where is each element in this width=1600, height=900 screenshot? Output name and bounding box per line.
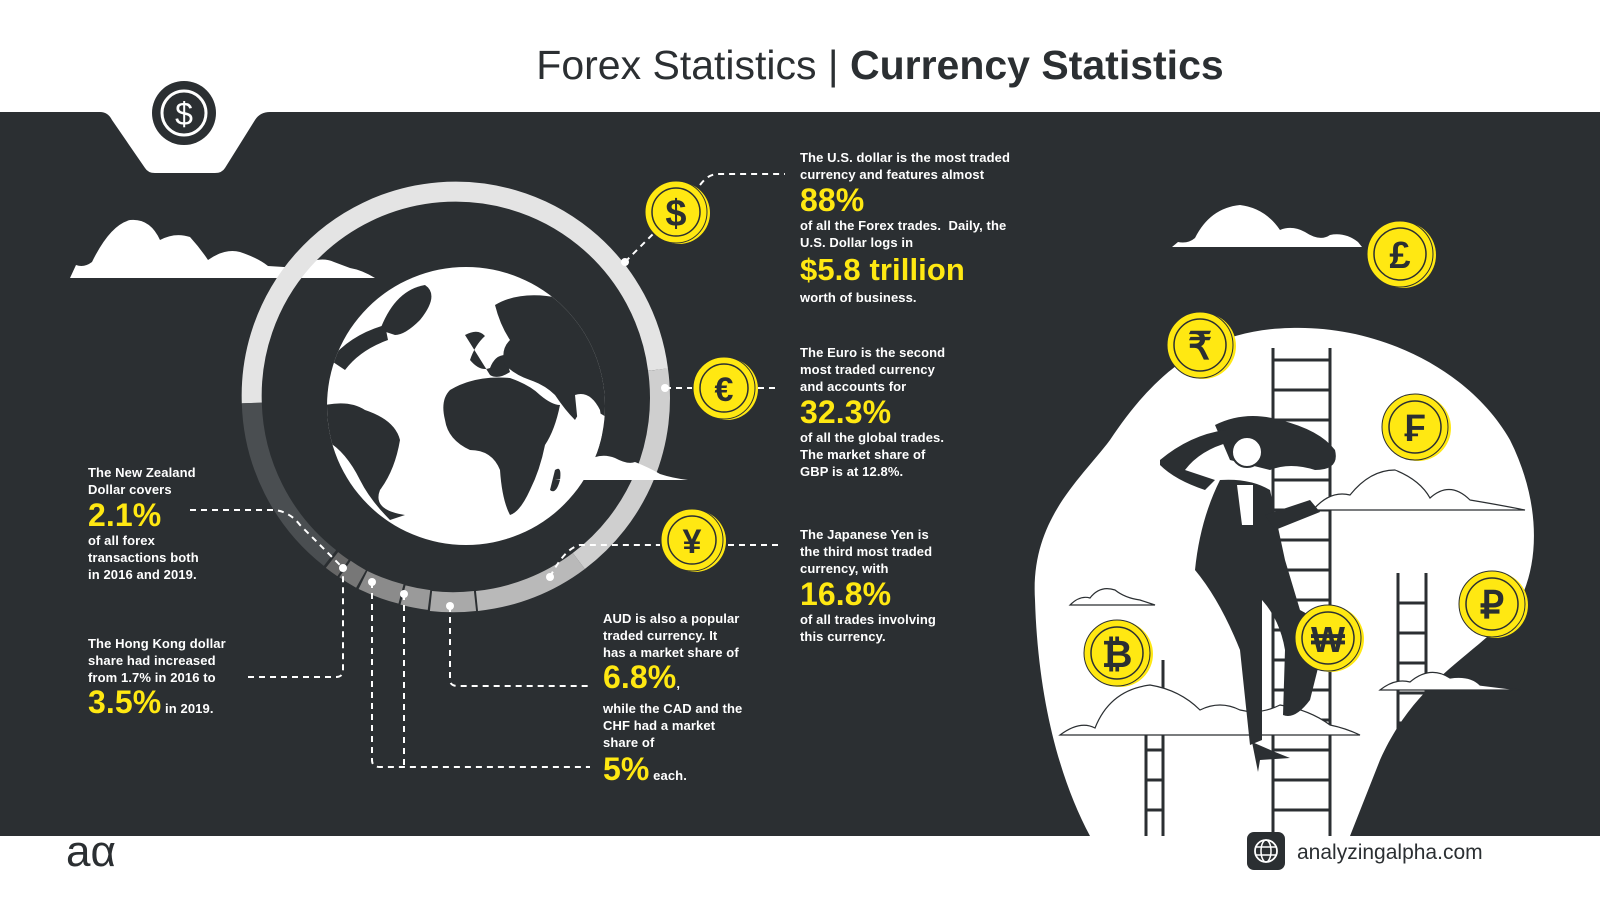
coin: franc	[1382, 394, 1451, 461]
coin: euro: €	[715, 371, 734, 409]
ladders	[1146, 348, 1426, 836]
coin: yen	[661, 509, 726, 572]
coin: yen: ¥	[683, 523, 702, 561]
text: Euro: The Euro is the second most traded currency and accounts for of all the global trades. The market share of GBP is at 12.8%.	[800, 345, 945, 479]
globe	[325, 267, 610, 545]
coin: rupee	[1167, 312, 1236, 379]
footer logo: aα	[66, 827, 116, 876]
footer website: analyzingalpha.com	[1297, 841, 1483, 864]
cloud: left	[70, 220, 375, 278]
text: AUD CAD CHF: 6.8%,	[603, 659, 680, 695]
text: HKD: 3.5% in 2019.	[88, 684, 214, 720]
connectors	[190, 174, 785, 767]
ring chart	[252, 192, 660, 602]
text: Yen: The Japanese Yen is the third most traded currency, with of all trades involving this currency.	[800, 527, 936, 644]
woman	[1160, 416, 1336, 772]
coin: bitcoin: ₿	[1102, 634, 1132, 676]
coin: won: ₩	[1311, 619, 1345, 660]
text: Yen: 16.8%	[800, 576, 891, 612]
coin: dollar	[645, 181, 710, 244]
cloud: globe	[555, 456, 688, 480]
coin: pound: £	[1389, 235, 1411, 277]
coin: rupee: ₹	[1188, 326, 1212, 368]
coin: franc: ₣	[1404, 408, 1426, 450]
icon: dollar badge	[152, 81, 216, 145]
clouds in illustration	[1060, 470, 1525, 735]
text: NZD: The New Zealand Dollar covers of all forex transactions both in 2016 and 2019.	[88, 465, 199, 582]
cloud: top right	[1172, 205, 1362, 247]
coin: ruble: ₽	[1480, 585, 1504, 627]
text: USD: $5.8 trillion	[800, 252, 965, 287]
text: HKD: The Hong Kong dollar share had increased from 1.7% in 2016 to	[88, 636, 226, 685]
coin: bitcoin	[1084, 620, 1153, 687]
coin: dollar: $	[665, 193, 687, 235]
icon: dollar badge: $	[175, 96, 193, 132]
footer website	[1247, 832, 1483, 870]
coin: pound	[1367, 221, 1436, 288]
text: Euro: 32.3%	[800, 394, 891, 430]
text: HKD	[88, 636, 226, 720]
text: AUD CAD CHF: 5% each.	[603, 751, 687, 787]
coin: won	[1295, 605, 1364, 672]
coin: euro	[693, 357, 758, 420]
title: Forex Statistics | Currency Statistics	[536, 42, 1224, 88]
coin: ruble	[1459, 571, 1528, 638]
text: USD: The U.S. dollar is the most traded currency and features almost of all the Forex trades. Daily, the U.S. Dollar logs in worth of business.	[800, 150, 1010, 305]
text: AUD CAD CHF: AUD is also a popular traded currency. It has a market share of while the CAD and the CHF had a market share of	[603, 611, 742, 750]
illustration blob	[1035, 328, 1534, 836]
text: NZD: 2.1%	[88, 497, 161, 533]
text: USD: 88%	[800, 182, 864, 218]
